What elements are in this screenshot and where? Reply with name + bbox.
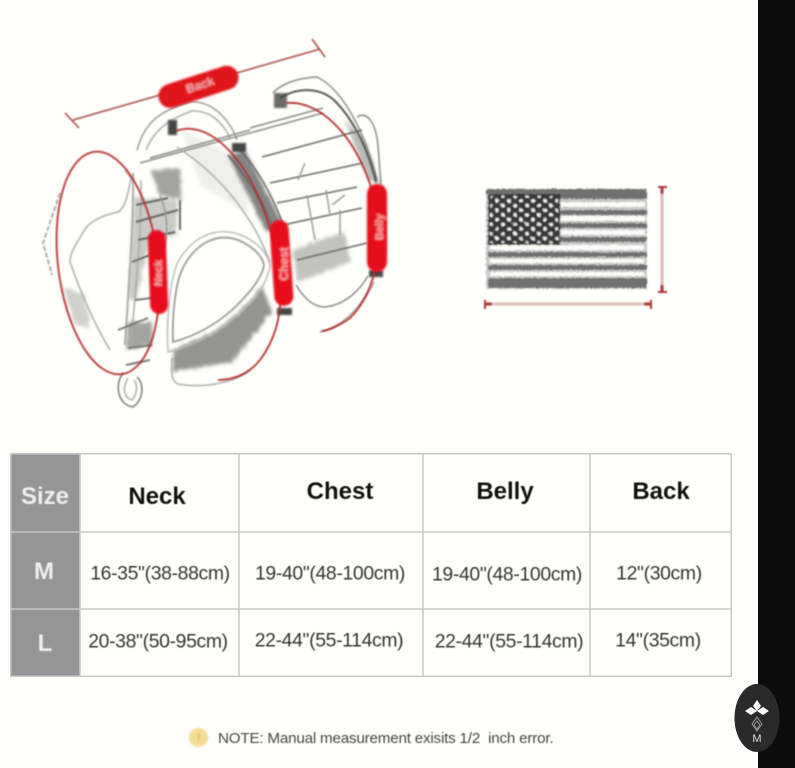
watermark badge: M bbox=[752, 733, 762, 745]
label: Back bbox=[155, 63, 242, 111]
harness drawing bbox=[43, 77, 386, 407]
note icon: ! bbox=[197, 730, 200, 745]
header row: Belly bbox=[476, 478, 534, 505]
row M: 19-40"(48-100cm) bbox=[255, 562, 405, 584]
row M: M bbox=[34, 558, 54, 585]
row L: 14"(35cm) bbox=[615, 630, 701, 652]
chest strap webbing bbox=[228, 150, 282, 225]
harness dark buckles bbox=[168, 93, 383, 315]
width arrow bbox=[485, 300, 651, 309]
flag bbox=[486, 189, 647, 289]
header row bbox=[21, 478, 690, 510]
label: Belly bbox=[367, 184, 387, 272]
neck padding bbox=[70, 170, 131, 350]
body edges bbox=[177, 147, 270, 262]
table grid bbox=[10, 453, 732, 677]
label: Neck bbox=[148, 230, 168, 314]
label: Chest bbox=[269, 219, 294, 307]
bottom ring bbox=[118, 373, 142, 407]
buckles bbox=[132, 198, 180, 262]
header row: Chest bbox=[307, 478, 373, 505]
belly pad bbox=[173, 238, 264, 342]
header row: Back bbox=[632, 478, 690, 505]
row L: L bbox=[38, 630, 52, 657]
measurement: neck loop bbox=[45, 146, 171, 380]
size column background bbox=[10, 453, 80, 677]
label: Belly: Belly bbox=[374, 213, 386, 240]
note text: NOTE: Manual measurement exisits 1/2 inch error. bbox=[218, 730, 553, 747]
back panel rows bbox=[140, 108, 323, 163]
label: Chest: Chest bbox=[277, 247, 291, 281]
row L: 20-38"(50-95cm) bbox=[88, 630, 228, 652]
lower rear curves bbox=[296, 276, 368, 307]
row L: 22-44"(55-114cm) bbox=[435, 630, 583, 652]
black side band bbox=[758, 0, 795, 768]
label: Back: Back bbox=[184, 74, 216, 96]
note icon bbox=[189, 728, 208, 747]
measurement: back line bbox=[65, 39, 325, 128]
top handle bbox=[137, 102, 237, 150]
size table bbox=[10, 453, 732, 677]
flag patch with dimension arrows bbox=[482, 184, 668, 310]
label: Neck: Neck bbox=[153, 259, 165, 286]
harness shading bbox=[63, 120, 380, 372]
rear handle bbox=[273, 77, 377, 180]
header row: Neck bbox=[128, 483, 186, 510]
row M: 16-35"(38-88cm) bbox=[90, 562, 230, 584]
row M bbox=[34, 558, 702, 586]
row L: 22-44"(55-114cm) bbox=[255, 630, 403, 652]
watermark badge bbox=[734, 684, 780, 752]
measurement: belly curve bbox=[286, 103, 378, 331]
harness illustration with measurement lines bbox=[41, 38, 389, 408]
row M: 12"(30cm) bbox=[616, 562, 702, 584]
row M: 19-40"(48-100cm) bbox=[432, 564, 582, 586]
height arrow bbox=[658, 187, 667, 292]
measurement: chest curve bbox=[176, 129, 281, 380]
header row: Size bbox=[21, 483, 69, 510]
